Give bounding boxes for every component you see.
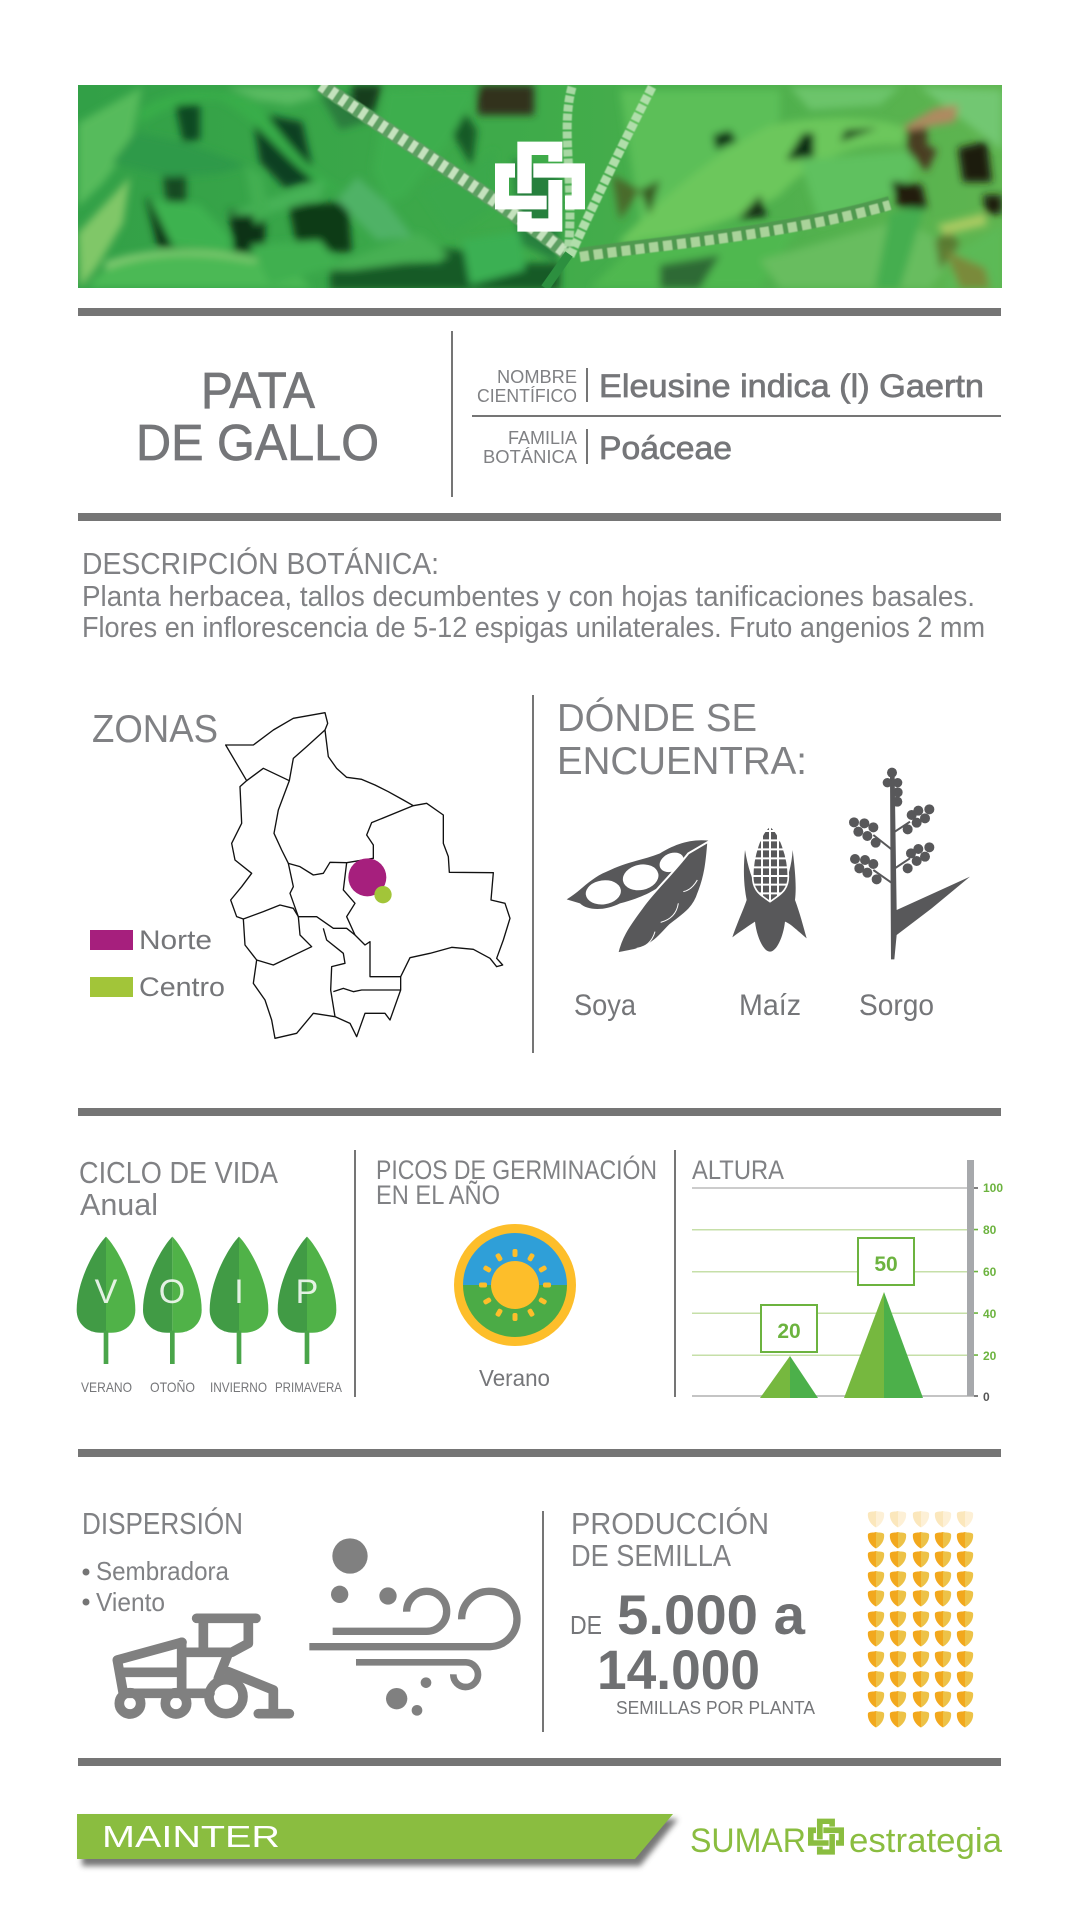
donde se encuentra heading: [557, 697, 807, 783]
grass spike: right: [570, 87, 652, 256]
seed production heading: PRODUCCIÓN: [571, 1506, 769, 1541]
bar: 50: [844, 1238, 923, 1398]
grass stem: [545, 254, 569, 288]
botanical description: Flores en inflorescencia de 5-12 espigas unilaterales. Fruto angenios 2 mm: [82, 612, 985, 644]
zone marker: norte: [348, 858, 386, 896]
leaf letters: [95, 1273, 318, 1311]
grass spikes: [321, 85, 890, 257]
divider rule: [78, 1449, 1001, 1457]
leaf letters: I: [234, 1273, 244, 1311]
axis labels: 80: [983, 1223, 997, 1237]
leaf letters: V: [95, 1273, 118, 1311]
title: PATA: [201, 362, 315, 419]
leaf: primavera: [278, 1237, 336, 1364]
botanical description: Planta herbacea, tallos decumbentes y con hojas tanificaciones basales.: [82, 581, 975, 613]
icon: soya pods: [567, 840, 709, 953]
dispersal list: Sembradora: [96, 1556, 230, 1586]
crop labels: Sorgo: [859, 989, 934, 1022]
vertical divider: [451, 331, 453, 497]
vertical divider: [542, 1511, 544, 1732]
height chart: [692, 1160, 1003, 1404]
axis labels: 60: [983, 1265, 997, 1279]
axis labels: 100: [983, 1181, 1003, 1195]
map of Bolivia with zones: [226, 713, 510, 1038]
botanical description: DESCRIPCIÓN BOTÁNICA:: [82, 546, 439, 581]
footer logo: sumar estrategia: [690, 1819, 1002, 1860]
botanical family: BOTÁNICA: [483, 447, 577, 467]
season labels: VERANO: [81, 1379, 132, 1395]
footer banner: mainter: [77, 1814, 678, 1866]
vertical divider: [354, 1150, 356, 1397]
crop labels: Maíz: [739, 989, 801, 1022]
life cycle heading: CICLO DE VIDA: [79, 1155, 278, 1190]
divider rule: [78, 1758, 1001, 1766]
title: [136, 362, 379, 471]
botanical family: FAMILIA: [508, 428, 577, 448]
seed pictogram: [868, 1511, 973, 1728]
season label: Verano: [479, 1365, 550, 1391]
legend: Centro: [139, 972, 225, 1002]
life cycle heading: [79, 1155, 278, 1222]
seed production figures: 14.000: [597, 1638, 760, 1701]
leaf: invierno: [210, 1237, 268, 1364]
height heading: ALTURA: [692, 1155, 784, 1185]
scientific name: Eleusine indica (l) Gaertn: [599, 368, 984, 404]
donde se encuentra heading: DÓNDE SE: [557, 697, 757, 740]
season labels: INVIERNO: [210, 1379, 267, 1395]
divider rule: [78, 1108, 1001, 1116]
icon: summer sun: [454, 1224, 576, 1346]
dark gaps right: [786, 133, 814, 160]
infographic page: [76, 85, 1003, 1870]
season labels: OTOÑO: [150, 1379, 195, 1395]
zone marker: centro: [374, 886, 392, 903]
vertical divider: [532, 695, 534, 1053]
season leaves: [77, 1237, 336, 1364]
axis labels: [983, 1181, 1003, 1404]
footer logo: sumar estrategia: estrategia: [849, 1822, 1002, 1860]
footer logo: sumar estrategia: SUMAR: [690, 1822, 806, 1860]
seed production figures: 5.000 a: [617, 1583, 806, 1646]
leaf: otoño: [143, 1237, 202, 1364]
germination heading: EN EL AÑO: [376, 1179, 500, 1210]
seed production figures: SEMILLAS POR PLANTA: [616, 1698, 815, 1718]
donde se encuentra heading: ENCUENTRA:: [557, 740, 807, 783]
divider rule: [78, 513, 1001, 521]
dispersal heading: DISPERSIÓN: [82, 1506, 243, 1541]
axis labels: 0: [983, 1390, 990, 1404]
vertical divider: [674, 1150, 676, 1397]
icon: sorghum: [849, 768, 970, 959]
germination heading: [376, 1154, 657, 1210]
seed production figures: DE: [570, 1610, 602, 1640]
header photo: grass with spikes and logo: [78, 85, 1002, 290]
legend: [90, 925, 225, 1002]
seed production heading: DE SEMILLA: [571, 1538, 731, 1573]
bar: 20: 20: [777, 1320, 801, 1343]
grass spike: horizontal: [580, 203, 890, 257]
zonas heading: ZONAS: [92, 708, 218, 751]
leaf: verano: [77, 1237, 135, 1364]
grass spike: vertical: [567, 87, 572, 256]
footer banner: mainter: MAINTER: [102, 1819, 280, 1854]
crop labels: [574, 989, 934, 1022]
leaf letters: O: [159, 1273, 185, 1311]
scientific name: NOMBRE: [497, 367, 577, 387]
dispersal list: [82, 1556, 230, 1617]
axis labels: 20: [983, 1349, 997, 1363]
axis labels: 40: [983, 1307, 997, 1321]
leaves left: [78, 87, 142, 207]
bar: 20: [760, 1305, 818, 1398]
grass spike: left: [321, 85, 570, 256]
right side leaves: [620, 90, 780, 220]
botanical description: [82, 546, 985, 644]
germination heading: PICOS DE GERMINACIÓN: [376, 1154, 657, 1185]
seed production figures: [570, 1583, 815, 1718]
icon: corn: [732, 823, 807, 952]
dispersal list: Viento: [96, 1587, 165, 1617]
seed production heading: [571, 1506, 769, 1573]
botanical family: [483, 428, 732, 467]
logo mark: [495, 142, 585, 232]
legend: Norte: [139, 925, 212, 955]
crop labels: Soya: [574, 989, 636, 1022]
title: DE GALLO: [136, 414, 379, 471]
scientific name: [477, 367, 984, 406]
bar: 50: 50: [874, 1253, 898, 1276]
dark gaps left: [175, 105, 200, 142]
icon: seeder machine: [117, 1618, 289, 1714]
icon: wind: [309, 1538, 517, 1716]
leaf letters: P: [296, 1273, 318, 1311]
season labels: [81, 1379, 343, 1395]
scientific name: CIENTÍFICO: [477, 386, 577, 406]
botanical family: Poáceae: [599, 430, 732, 466]
life cycle heading: Anual: [80, 1187, 158, 1222]
divider rule: [78, 308, 1001, 316]
season labels: PRIMAVERA: [275, 1379, 343, 1395]
